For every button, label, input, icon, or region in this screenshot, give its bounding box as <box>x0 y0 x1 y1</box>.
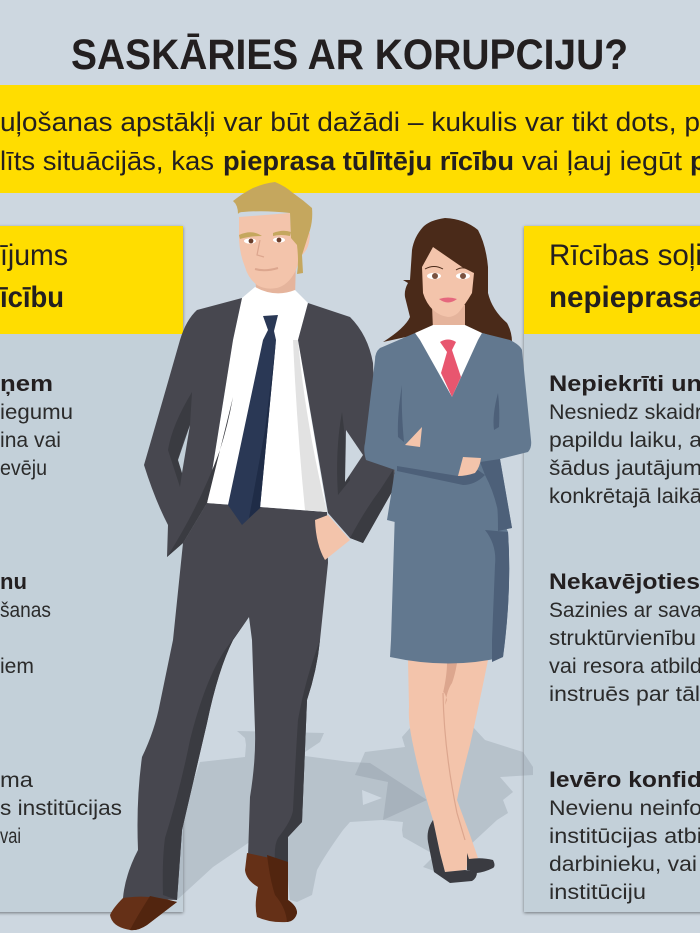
right item 3: Ievēro konfid <box>549 767 700 792</box>
intro band <box>0 85 700 193</box>
panel: right <box>524 226 700 912</box>
left item 2 <box>0 569 51 678</box>
man trousers <box>123 503 328 900</box>
man shirt shade <box>293 340 327 512</box>
right item 2: instruēs par tāl <box>549 683 700 706</box>
left item 1: iegumu <box>0 401 73 424</box>
man tie <box>228 315 278 525</box>
woman shoes <box>428 820 494 883</box>
man hand <box>315 515 350 560</box>
woman face <box>422 247 474 330</box>
right item 1 <box>549 371 700 508</box>
man shirt <box>207 287 327 512</box>
figure: man <box>110 182 395 930</box>
right panel heading <box>549 239 700 314</box>
right item 2: vai resora atbild <box>549 655 700 678</box>
intro text line 2: līts situācijās, kas <box>0 146 214 176</box>
right item 3: institūcijas atbi <box>549 825 700 848</box>
man neck and face <box>239 213 310 296</box>
floor shadow <box>170 727 533 902</box>
woman blouse <box>415 325 482 397</box>
woman jacket <box>364 333 531 531</box>
right item 2: Sazinies ar sava <box>549 599 700 622</box>
left item 3 <box>0 769 122 848</box>
left panel heading <box>0 239 68 314</box>
right item 3: Nevienu neinfo <box>549 797 700 820</box>
left item 2: šanas <box>0 599 51 622</box>
man shoes <box>110 853 297 930</box>
left panel heading: īcību <box>0 281 64 314</box>
woman hands <box>405 427 481 476</box>
right item 2 <box>549 569 700 706</box>
intro text line 1: uļošanas apstākļi var būt dažādi – kukulis var tikt dots, p <box>0 107 700 137</box>
right item 3: institūciju <box>549 881 646 904</box>
right item 3: darbinieku, vai <box>549 853 697 876</box>
woman skirt <box>390 510 509 664</box>
intro text line 2: vai ļauj iegūt <box>522 146 683 176</box>
right item 1: konkrētajā laikā <box>549 485 700 508</box>
left item 1: ņem <box>0 371 53 396</box>
woman tie <box>440 340 461 397</box>
left item 3: ma <box>0 769 33 792</box>
left item 1: ina vai <box>0 429 61 452</box>
woman hair <box>383 218 512 342</box>
left item 1 <box>0 371 73 480</box>
left item 3: s institūcijas <box>0 797 122 820</box>
right item 1: Nepiekrīti un <box>549 371 700 396</box>
left panel heading: ījums <box>0 239 68 272</box>
left item 3: vai <box>0 825 21 848</box>
intro text line 2: pieprasa tūlītēju rīcību <box>223 146 514 176</box>
left item 2: nu <box>0 569 27 594</box>
man jacket <box>144 298 395 557</box>
panel: left <box>0 226 183 912</box>
right item 2: Nekavējoties <box>549 569 700 594</box>
right item 2: struktūrvienību <box>549 627 696 650</box>
right item 1: Nesniedz skaidr <box>549 401 700 424</box>
left item 1: evēju <box>0 457 47 480</box>
right item 1: papildu laiku, a <box>549 429 700 452</box>
title: SASKĀRIES AR KORUPCIJU? <box>71 31 628 79</box>
right item 1: šādus jautājum <box>549 457 700 480</box>
figure: woman <box>364 218 531 883</box>
man hair <box>233 182 312 274</box>
right panel heading: Rīcības soļi <box>549 239 700 272</box>
right item 3 <box>549 767 700 904</box>
left item 2: iem <box>0 655 34 678</box>
woman legs <box>408 660 488 872</box>
